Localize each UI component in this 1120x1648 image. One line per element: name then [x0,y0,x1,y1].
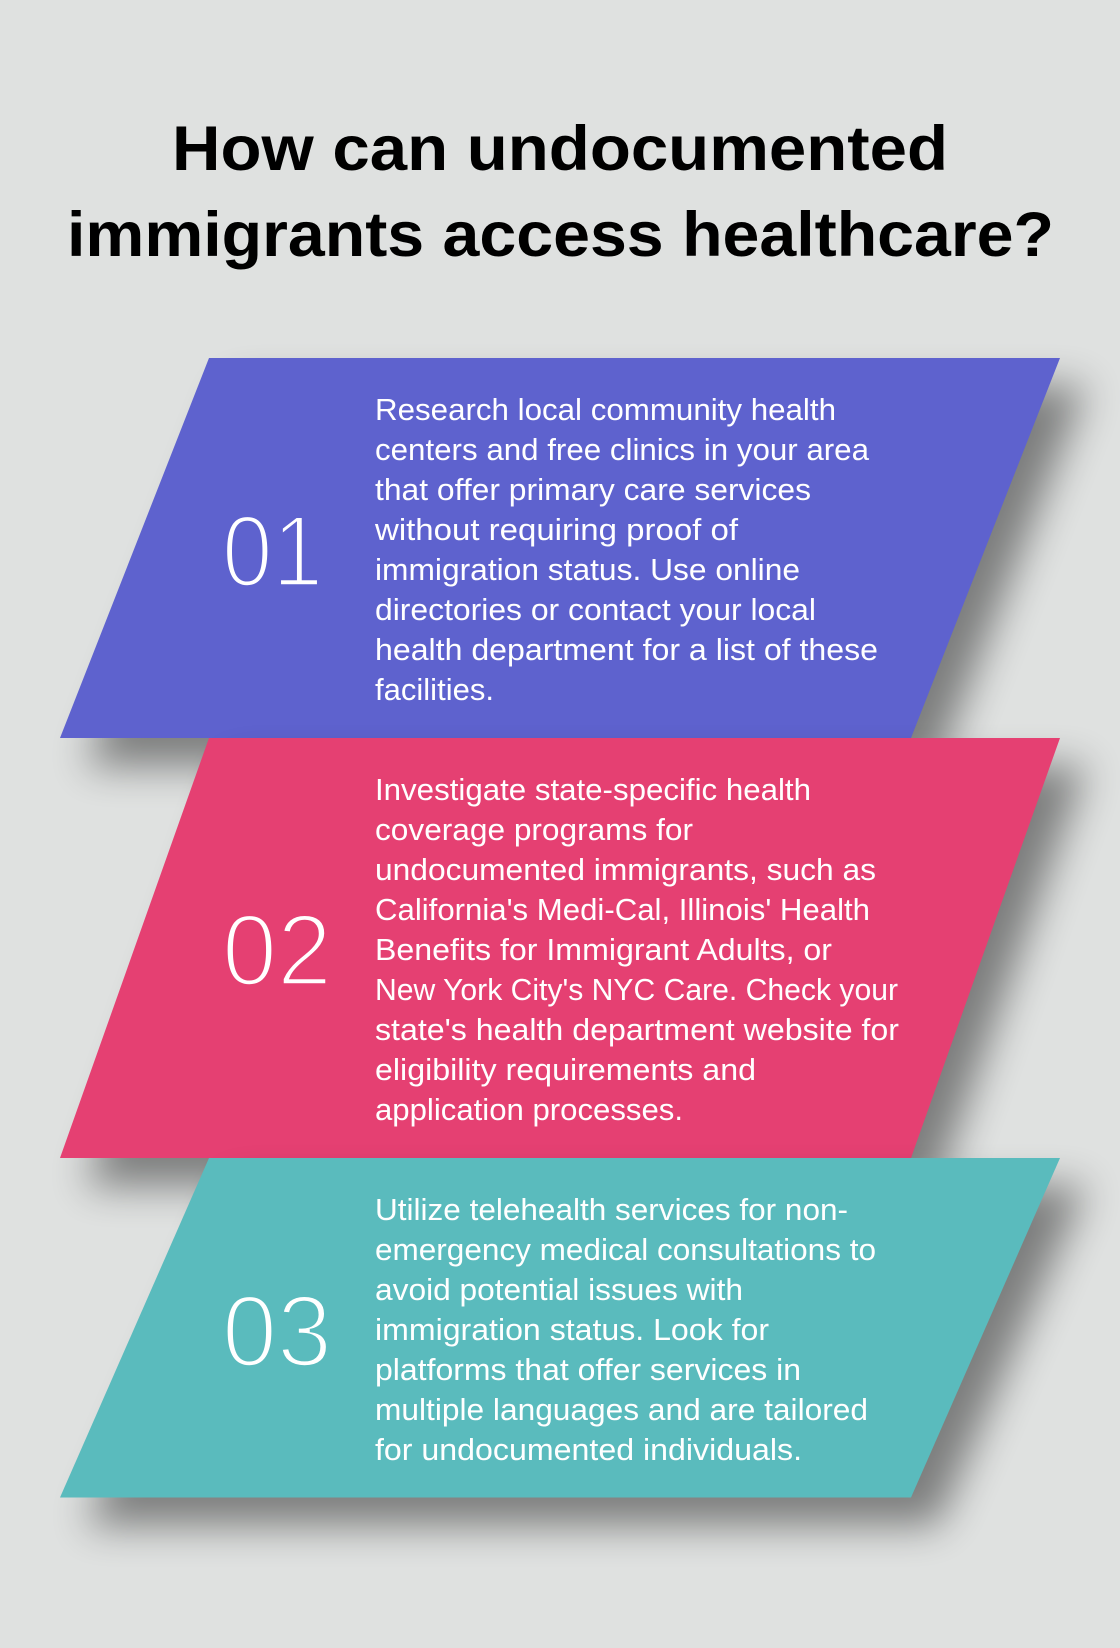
panel shape 01 [60,358,1060,738]
text block 03: immigration status. Look for [375,1312,769,1347]
text block 01: directories or contact your local [375,592,816,627]
text block 02: eligibility requirements and [375,1052,756,1087]
number 03: 03 [222,1276,332,1388]
text block 02: Investigate state-specific health [375,772,811,807]
text block 02: Benefits for Immigrant Adults, or [375,932,832,967]
text block 03: Utilize telehealth services for non- [375,1192,848,1227]
panel: step 01 [60,358,1086,766]
text block 03: emergency medical consultations to [375,1232,876,1267]
number 01: 01 [222,496,323,608]
text block 02: undocumented immigrants, such as [375,852,876,887]
text block 03: platforms that offer services in [375,1352,801,1387]
text block 02: state's health department website for [375,1012,899,1047]
title: How can undocumented [172,114,948,184]
panel shape 02 [60,738,1060,1158]
text block 03: multiple languages and are tailored [375,1392,868,1427]
text block 01: immigration status. Use online [375,552,800,587]
text block 01: health department for a list of these [375,632,878,667]
text block 01: centers and free clinics in your area [375,432,870,467]
title: immigrants access healthcare? [67,200,1054,270]
text block 03: for undocumented individuals. [375,1432,802,1467]
text block 01: facilities. [375,672,494,707]
title [67,114,1054,270]
text block 01: Research local community health [375,392,836,427]
number 02: 02 [222,895,332,1007]
text block 02: California's Medi-Cal, Illinois' Health [375,892,870,927]
text block 03: avoid potential issues with [375,1272,743,1307]
panel shape 03 [60,1158,1060,1498]
text block 02 [375,772,899,1127]
text block 03 [375,1192,876,1467]
panel: step 03 [60,1158,1086,1526]
text block 02: coverage programs for [375,812,693,847]
text block 02: New York City's NYC Care. Check your [375,972,898,1007]
text block 01: without requiring proof of [374,512,738,547]
text block 01 [374,392,878,707]
text block 01: that offer primary care services [375,472,811,507]
text block 02: application processes. [375,1092,683,1127]
panel: step 02 [60,738,1086,1186]
